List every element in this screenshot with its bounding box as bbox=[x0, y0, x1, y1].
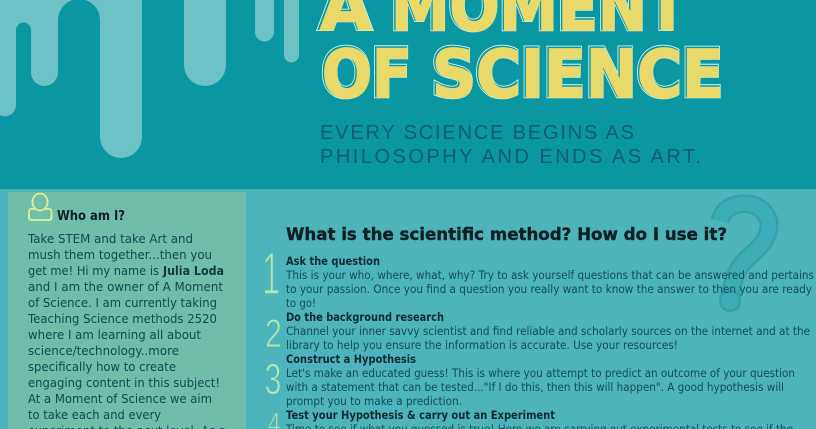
numeral 2: 2 bbox=[265, 311, 282, 356]
step 1: to go! bbox=[286, 297, 316, 310]
heading: scientific method: What is the scientific method? How do I use it? bbox=[286, 225, 727, 245]
panel: who am I bbox=[8, 192, 246, 429]
text block: biography: to take each and every bbox=[28, 408, 161, 422]
text block: biography: Julia Loda bbox=[162, 264, 224, 278]
subtitle: PHILOSOPHY AND ENDS AS ART. bbox=[320, 146, 701, 168]
step 2 bbox=[286, 310, 810, 352]
text block: biography: specifically how to create bbox=[28, 360, 176, 374]
step 2: library to help you ensure the information is accurate. Use your resources! bbox=[286, 339, 678, 352]
numeral 1: 1 bbox=[262, 242, 280, 308]
step 2: Do the background research bbox=[286, 310, 444, 324]
text block: biography: mush them together...then you bbox=[28, 248, 212, 262]
subtitle bbox=[320, 122, 701, 168]
title: SCIENCE bbox=[431, 35, 723, 112]
text block: biography: science/technology..more bbox=[28, 344, 179, 358]
title: SCIENCE bbox=[432, 36, 724, 113]
heading: who am I: Who am I? bbox=[57, 208, 125, 224]
step 3: with a statement that can be tested..."If I do this, then this will happen". A good hypothesis will bbox=[286, 381, 784, 394]
text block: biography: where I am learning all about bbox=[28, 328, 201, 342]
title: OF bbox=[321, 35, 411, 112]
title: SCIENCE bbox=[431, 35, 723, 112]
step 1: Ask the question bbox=[286, 254, 380, 268]
subtitle: EVERY SCIENCE BEGINS AS bbox=[320, 122, 634, 144]
text block: biography bbox=[27, 232, 226, 429]
text block: biography: Take STEM and take Art and bbox=[27, 232, 193, 246]
text block: biography: get me! Hi my name is bbox=[28, 264, 159, 278]
text block: biography: Teaching Science methods 2520 bbox=[27, 312, 217, 326]
drips decoration bbox=[0, 0, 299, 158]
text block: biography: At a Moment of Science we aim bbox=[28, 392, 212, 406]
title bbox=[319, 0, 724, 113]
panel: header band bbox=[0, 0, 816, 189]
step 4: Test your Hypothesis & carry out an Experiment bbox=[286, 408, 555, 422]
title: OF bbox=[322, 36, 412, 113]
step 3: prompt you to make a prediction. bbox=[286, 395, 462, 408]
panel: lower background bbox=[0, 189, 816, 429]
text block: biography: engaging content in this subject! bbox=[28, 376, 220, 390]
text block: biography: of Science. I am currently taking bbox=[28, 296, 217, 310]
icon: person bbox=[29, 194, 52, 220]
step 4 bbox=[285, 408, 793, 429]
step 3 bbox=[286, 352, 795, 408]
numeral 3: 3 bbox=[264, 355, 281, 403]
title: OF bbox=[321, 35, 411, 112]
step 3: Construct a Hypothesis bbox=[286, 352, 416, 366]
text block: biography: and I am the owner of A Moment bbox=[28, 280, 223, 294]
icon: question mark bbox=[720, 204, 769, 311]
step 1 bbox=[285, 254, 814, 310]
